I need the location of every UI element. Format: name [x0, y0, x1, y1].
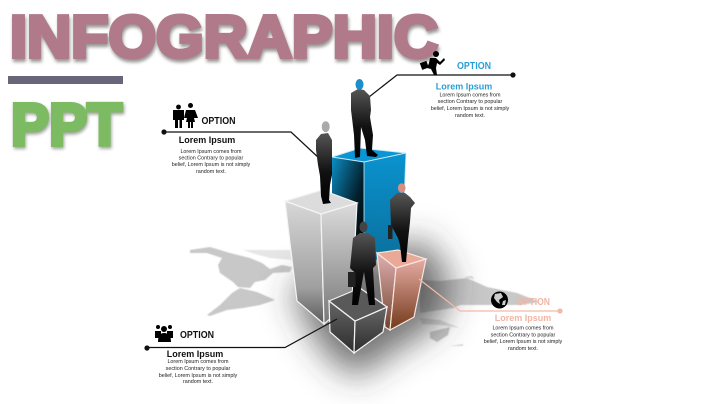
option block: globe: OPTION	[517, 297, 550, 308]
bar: blue column	[332, 148, 406, 262]
body text: Lorem Ipsum comes from	[167, 359, 229, 365]
connector: pink line	[419, 279, 562, 313]
icon: runner	[420, 51, 445, 75]
option block: couple: OPTION	[202, 116, 236, 127]
body text: belief, Lorem Ipsum is not simply	[159, 373, 238, 379]
body text: section Contrary to popular	[438, 99, 503, 105]
world map	[190, 247, 540, 346]
person: on pink column	[388, 183, 415, 262]
option block: runner: OPTION	[457, 61, 491, 72]
body text	[172, 149, 251, 175]
person: top on blue column	[351, 79, 378, 158]
title: INFOGRAPHIC: INFOGRAPHIC	[11, 7, 439, 73]
body text: random text.	[196, 169, 226, 175]
body text	[431, 92, 510, 119]
option block: runner	[420, 51, 510, 119]
connector: bottom left line	[145, 319, 337, 350]
body text: belief, Lorem Ipsum is not simply	[484, 339, 563, 345]
option block: team: OPTION	[180, 330, 214, 341]
body text: section Contrary to popular	[179, 156, 244, 162]
body text	[159, 359, 238, 385]
body text: random text.	[183, 379, 213, 385]
connector: top right line	[369, 73, 515, 97]
bar: grey column	[285, 190, 357, 324]
body text: Lorem Ipsum comes from	[180, 149, 242, 155]
person: on grey column	[316, 121, 332, 204]
body text: random text.	[508, 346, 538, 352]
option block: couple	[172, 103, 251, 175]
icon: team	[155, 325, 173, 342]
divider bar	[8, 76, 123, 84]
body text	[484, 326, 563, 352]
body text: belief, Lorem Ipsum is not simply	[172, 162, 251, 168]
subtitle: PPT: PPT	[11, 92, 122, 158]
option block: runner: Lorem Ipsum	[436, 82, 492, 92]
bar: pink column	[377, 250, 426, 330]
person: on dark column	[329, 222, 387, 353]
body text: random text.	[455, 113, 485, 119]
title: INFOGRAPHIC: INFOGRAPHIC	[10, 4, 438, 70]
dark column	[329, 288, 387, 353]
icon: globe	[491, 292, 508, 308]
body text: Lorem Ipsum comes from	[439, 92, 501, 98]
option block: team: Lorem Ipsum	[167, 349, 223, 359]
subtitle: PPT: PPT	[12, 94, 123, 160]
option block: team	[155, 325, 238, 385]
option block: couple: Lorem Ipsum	[179, 135, 235, 145]
option block: globe	[484, 292, 563, 352]
option block: globe: Lorem Ipsum	[495, 313, 551, 323]
body text: section Contrary to popular	[166, 366, 231, 372]
body text: belief, Lorem Ipsum is not simply	[431, 106, 510, 112]
ground shadow	[290, 240, 452, 378]
body text: section Contrary to popular	[491, 332, 556, 338]
connector: top left line	[162, 130, 320, 159]
body text: Lorem Ipsum comes from	[492, 326, 554, 332]
icon: couple	[173, 103, 198, 128]
